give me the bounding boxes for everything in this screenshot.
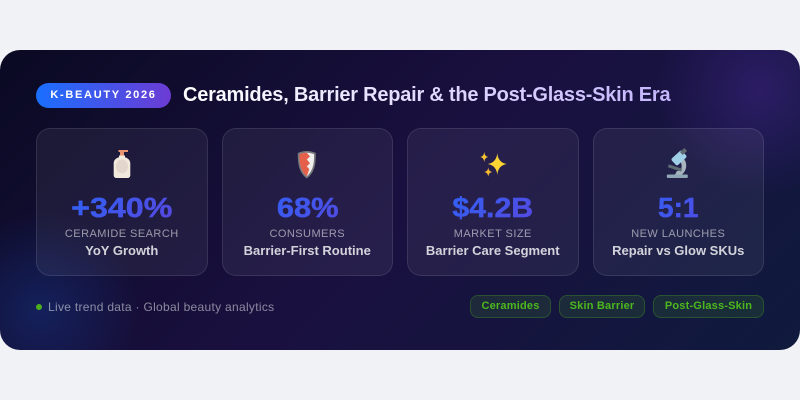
tag: ceramides bbox=[470, 295, 551, 318]
icon: shield bbox=[298, 151, 316, 178]
panel: main dark card bbox=[0, 50, 800, 350]
stat label: CONSUMERS bbox=[269, 228, 345, 240]
stat description: Barrier-First Routine bbox=[244, 243, 371, 258]
stat label: MARKET SIZE bbox=[454, 228, 532, 240]
footer: live trend note: Live trend data · Global beauty analytics bbox=[48, 300, 274, 314]
stat value: 5:1 bbox=[658, 192, 698, 222]
stat description: YoY Growth bbox=[85, 243, 158, 258]
stat value bbox=[401, 190, 584, 226]
stat label: CERAMIDE SEARCH bbox=[65, 228, 179, 240]
tag: ceramides: Ceramides bbox=[481, 300, 540, 312]
panel: new launches stat bbox=[592, 128, 764, 276]
stat value bbox=[24, 190, 219, 226]
stat description: Barrier Care Segment bbox=[426, 243, 560, 258]
stat value bbox=[594, 190, 763, 226]
panel: market size stat bbox=[407, 128, 578, 276]
tag: skin barrier bbox=[559, 295, 645, 318]
stat description: Repair vs Glow SKUs bbox=[612, 243, 744, 258]
stat label: NEW LAUNCHES bbox=[631, 228, 725, 240]
panel: consumers stat bbox=[222, 128, 393, 276]
stat value: +340% bbox=[71, 192, 172, 222]
badge: K-Beauty 2026: K-BEAUTY 2026 bbox=[50, 89, 157, 101]
tag: post-glass-skin: Post-Glass-Skin bbox=[665, 300, 752, 312]
stat value: 68% bbox=[276, 192, 338, 222]
panel: ceramide search stat bbox=[36, 128, 208, 276]
badge: K-Beauty 2026 bbox=[36, 83, 171, 108]
tag: post-glass-skin bbox=[653, 295, 764, 318]
stat value: $4.2B bbox=[452, 192, 533, 222]
icon: microscope bbox=[666, 148, 688, 178]
stat value bbox=[214, 190, 400, 226]
icon: sparkles bbox=[480, 152, 506, 176]
tag: skin barrier: Skin Barrier bbox=[570, 300, 634, 312]
title: Ceramides, Barrier Repair & the Post-Glass-Skin Era bbox=[183, 84, 670, 106]
icon: lotion bottle bbox=[114, 150, 130, 178]
